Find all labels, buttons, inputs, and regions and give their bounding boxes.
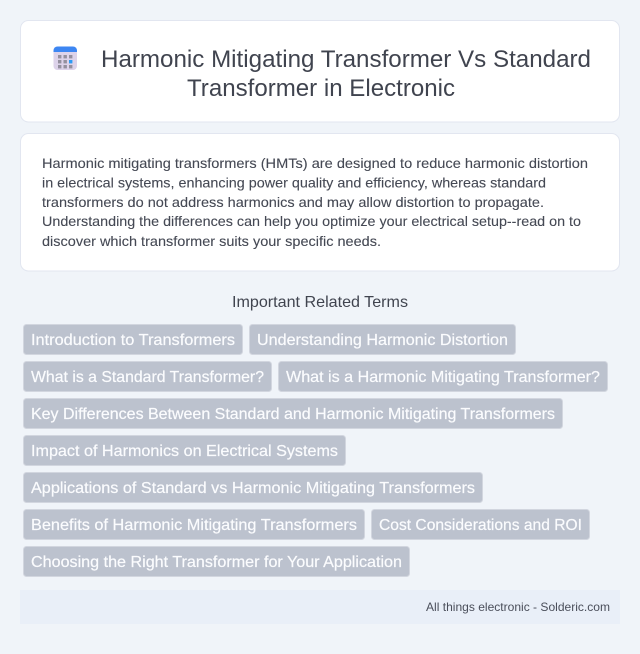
panel: intro paragraph card xyxy=(20,134,620,271)
tag: impact of harmonics xyxy=(24,436,346,466)
tag: choosing the right transformer xyxy=(24,546,410,576)
text block: intro paragraph: in electrical systems, enhancing power quality and efficiency, whereas standard xyxy=(42,174,546,190)
tag: harmonic mitigating transformer xyxy=(278,362,608,392)
tag: introduction: Introduction to Transformers xyxy=(31,332,235,349)
footer xyxy=(20,590,620,624)
title: Transformer in Electronic xyxy=(187,75,455,102)
tag: benefits xyxy=(24,510,364,540)
tag: impact of harmonics: Impact of Harmonics on Electrical Systems xyxy=(31,443,338,460)
tag: standard transformer xyxy=(24,362,272,392)
tag: introduction xyxy=(24,324,242,354)
text block: intro paragraph: discover which transformer suits your specific needs. xyxy=(42,233,381,249)
panel: title card xyxy=(20,20,620,122)
panel: related term tags xyxy=(24,324,608,576)
tag: benefits: Benefits of Harmonic Mitigating Transformers xyxy=(31,517,357,534)
title: Harmonic Mitigating Transformer Vs Standard xyxy=(101,46,591,73)
tag: harmonic distortion xyxy=(250,324,516,354)
icon: calendar xyxy=(54,46,77,70)
tag: key differences: Key Differences Between Standard and Harmonic Mitigating Transformers xyxy=(31,406,555,423)
tag: choosing the right transformer: Choosing the Right Transformer for Your Application xyxy=(31,554,402,571)
text block: intro paragraph: Understanding the differences can help you optimize your electrical setup--read on to xyxy=(42,213,581,229)
tag: standard transformer: What is a Standard Transformer? xyxy=(31,369,264,386)
tag: cost considerations xyxy=(372,510,590,540)
tag: applications: Applications of Standard vs Harmonic Mitigating Transformers xyxy=(31,480,475,497)
heading: important related terms: Important Related Terms xyxy=(232,294,408,311)
tag: cost considerations: Cost Considerations and ROI xyxy=(379,517,582,534)
title xyxy=(101,46,591,102)
tag: applications xyxy=(24,472,482,502)
text block: intro paragraph xyxy=(42,155,588,249)
text block: intro paragraph: Harmonic mitigating transformers (HMTs) are designed to reduce harmonic distortion xyxy=(42,155,588,171)
tag: harmonic distortion: Understanding Harmonic Distortion xyxy=(257,332,508,349)
footer: All things electronic - Solderic.com xyxy=(426,600,610,614)
tag: harmonic mitigating transformer: What is a Harmonic Mitigating Transformer? xyxy=(286,369,600,386)
tag: key differences xyxy=(24,398,562,428)
text block: intro paragraph: transformers do not address harmonics and may allow distortion to propagate. xyxy=(42,194,544,210)
